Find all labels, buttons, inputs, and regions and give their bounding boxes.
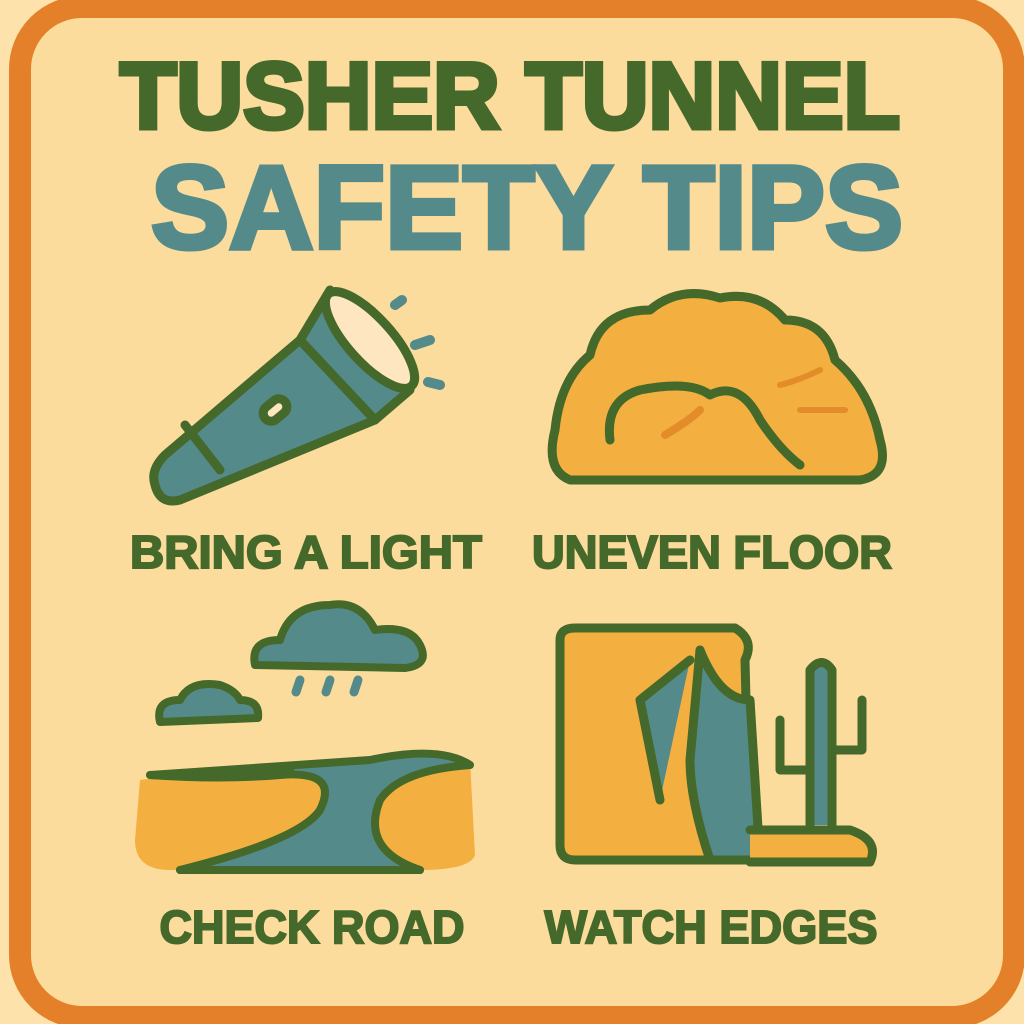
icon: watch edges cliff <box>560 628 872 862</box>
label: uneven floor: UNEVEN FLOOR <box>532 526 892 578</box>
icon: check road <box>135 604 475 870</box>
label: bring a light: BRING A LIGHT <box>130 526 482 578</box>
title: SAFETY TIPS <box>151 142 903 274</box>
title <box>120 43 903 274</box>
label: check road: CHECK ROAD <box>160 901 464 953</box>
icon: uneven floor rock <box>552 294 882 480</box>
label: watch edges: WATCH EDGES <box>544 901 878 953</box>
title: TUSHER TUNNEL <box>120 43 900 148</box>
icon: flashlight <box>154 279 440 501</box>
